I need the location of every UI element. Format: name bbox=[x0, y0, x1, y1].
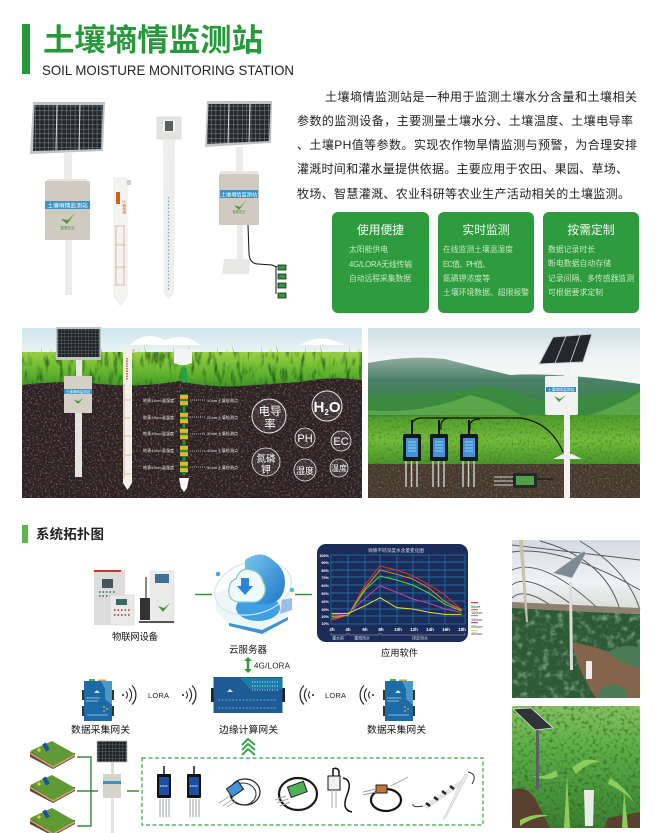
x axis labels: 10h bbox=[394, 627, 402, 632]
bubble: humidity: 湿度 bbox=[296, 465, 314, 476]
y axis labels: 70% bbox=[321, 576, 330, 580]
depth labels left: 地表20cm温湿度 bbox=[143, 415, 174, 420]
x axis labels: 12h bbox=[410, 627, 418, 632]
accent bar bbox=[22, 24, 30, 74]
bubble: NPK: 氮磷 bbox=[256, 453, 276, 465]
sensor: soil 4-pin B bbox=[187, 766, 201, 817]
label: LORA right: LORA bbox=[325, 691, 346, 700]
label: IoT equipment: 物联网设备 bbox=[112, 631, 159, 642]
soil bbox=[22, 378, 362, 498]
bubble: EC bbox=[331, 431, 351, 451]
intro paragraph: 土壤墒情监测站是一种用于监测土壤水分含量和土壤相关 bbox=[325, 89, 637, 104]
label: right gateway: 数据采集网关 bbox=[367, 723, 426, 736]
phase labels bbox=[331, 633, 465, 640]
depth labels right: 10cm土壤检测点 bbox=[207, 398, 238, 403]
dotted leaders bbox=[190, 400, 206, 467]
depth labels right: 50cm土壤检测点 bbox=[207, 465, 238, 470]
y axis labels bbox=[319, 554, 330, 626]
dashed frame bbox=[142, 758, 483, 825]
label: 4G/LORA uplink: 4G/LORA bbox=[254, 662, 291, 670]
product: solar station left: 智慧农业 bbox=[60, 225, 75, 230]
crops and soil bbox=[512, 608, 640, 698]
wireless icon 2 bbox=[182, 686, 196, 704]
data lines bbox=[332, 566, 462, 620]
logger box: 土壤墒情监测站 bbox=[548, 387, 574, 392]
y axis labels: 100% bbox=[319, 554, 330, 558]
bubble: H2O: O bbox=[329, 399, 341, 416]
heading text: 系统拓扑图 bbox=[36, 526, 104, 542]
field tiles bbox=[30, 741, 75, 833]
card: real-time monitoring bbox=[438, 212, 534, 313]
label: LORA left: LORA bbox=[148, 691, 169, 700]
sensor family box bbox=[142, 758, 483, 825]
intro paragraph: 牧场、智慧灌溉、农业科研等农业生产活动相关的土壤监测。 bbox=[297, 186, 630, 201]
panel: field scene with sensors bbox=[368, 328, 640, 498]
product: tube probe with display bbox=[157, 117, 181, 299]
product: ruler probe bbox=[114, 178, 131, 306]
bubble: EC: EC bbox=[333, 436, 349, 448]
card: custom built: 数据记录时长 bbox=[548, 244, 595, 254]
bubble: humidity bbox=[294, 459, 316, 481]
IoT equipment bbox=[94, 570, 174, 625]
heading: 土壤墒情监测站 bbox=[43, 23, 263, 58]
phase labels: 灌溉用水 bbox=[354, 634, 370, 640]
bubble: NPK: 钾 bbox=[261, 464, 271, 476]
upward chevrons bbox=[242, 739, 255, 755]
far wall band bbox=[512, 602, 640, 614]
bubble: temperature bbox=[330, 459, 348, 477]
bubble: H2O bbox=[312, 391, 342, 421]
depth labels right bbox=[207, 398, 238, 470]
depth labels right: 40cm土壤检测点 bbox=[207, 448, 238, 453]
wireless icon 3 bbox=[300, 686, 314, 704]
depth labels right: 30cm土壤检测点 bbox=[207, 431, 238, 436]
chart legend: 100cm bbox=[471, 611, 482, 615]
english subtitle: SOIL MOISTURE MONITORING STATION bbox=[42, 62, 294, 78]
bubble: NPK bbox=[252, 448, 280, 476]
y axis labels: 90% bbox=[321, 561, 330, 565]
intro paragraph: 参数的监测设备，主要测量土壤水分、土壤温度、土壤电导率 bbox=[297, 113, 633, 128]
depth labels right: 20cm土壤检测点 bbox=[207, 415, 238, 420]
y axis labels: 40% bbox=[321, 600, 330, 604]
card: real-time monitoring: 在线监测土壤温湿度 bbox=[443, 244, 513, 254]
bubble: PH bbox=[295, 428, 315, 448]
tube probe bbox=[123, 347, 135, 490]
section heading bbox=[22, 525, 104, 543]
meadow bbox=[368, 415, 640, 466]
depth labels left: 地表30cm温湿度 bbox=[143, 431, 174, 436]
x axis labels: 14h bbox=[426, 627, 434, 632]
sensor 3 bbox=[460, 420, 478, 487]
sensor 1 bbox=[403, 420, 421, 487]
card: custom built: 按需定制 bbox=[567, 223, 615, 237]
heading accent bbox=[22, 525, 28, 543]
bubble: conductivity: 电导 bbox=[258, 405, 282, 418]
two-way arrow bbox=[244, 657, 252, 673]
chart legend bbox=[471, 602, 482, 636]
card: custom built bbox=[543, 212, 639, 313]
depth labels left bbox=[143, 398, 174, 470]
field 2 bbox=[30, 775, 75, 803]
panel: soil cross-section bbox=[22, 327, 362, 498]
card: easy to use: 太阳能供电 bbox=[349, 244, 388, 254]
underground soil bbox=[368, 464, 640, 498]
product: station with sensors: 智慧农业 bbox=[233, 209, 245, 214]
soil probe tube bbox=[584, 790, 594, 826]
sensor: coiled orange bbox=[363, 777, 408, 811]
sensor 2 bbox=[430, 420, 448, 487]
small station bbox=[97, 741, 127, 833]
cables bbox=[412, 418, 563, 452]
label: application software: 应用软件 bbox=[381, 647, 418, 658]
greenhouse arches bbox=[512, 541, 640, 620]
card: real-time monitoring: EC值、PH值、 bbox=[443, 259, 490, 269]
multi-depth sensor bbox=[174, 349, 192, 492]
product: solar station left: 土壤墒情监测站 bbox=[47, 202, 88, 210]
y axis labels: 30% bbox=[321, 608, 330, 612]
left data gateway bbox=[82, 679, 114, 721]
chart legend: 150cm bbox=[471, 618, 482, 622]
card: real-time monitoring: 实时监测 bbox=[462, 223, 510, 237]
photo: greenhouse bbox=[512, 540, 640, 698]
photo: corn field bbox=[512, 706, 640, 828]
cloud server illustration bbox=[209, 553, 297, 634]
label: cloud server: 云服务器 bbox=[229, 644, 267, 656]
wireless icon 1 bbox=[122, 686, 136, 704]
card: easy to use bbox=[332, 212, 429, 313]
title block bbox=[22, 23, 294, 78]
x axis labels: 16h bbox=[442, 627, 450, 632]
product: solar station left bbox=[30, 102, 105, 295]
base plate bbox=[553, 454, 582, 459]
label: left gateway: 数据采集网关 bbox=[71, 723, 130, 736]
y axis labels: 80% bbox=[321, 569, 330, 573]
field 1 bbox=[30, 741, 75, 769]
station pole bbox=[564, 362, 570, 498]
bubble: temperature: 温度 bbox=[331, 463, 347, 473]
chart legend: 200cm bbox=[471, 625, 482, 629]
card: real-time monitoring: 氮磷钾浓度等 bbox=[443, 273, 490, 283]
logger box bbox=[545, 376, 578, 415]
y axis labels: 10% bbox=[321, 622, 330, 626]
connector lines bbox=[195, 594, 312, 596]
chart title: 墒情不同深度水含量变化图 bbox=[368, 547, 424, 554]
bubble: conductivity bbox=[252, 399, 286, 433]
depth labels left: 地表40cm温湿度 bbox=[143, 448, 174, 453]
depth labels left: 地表50cm温湿度 bbox=[143, 465, 174, 470]
plot grid bbox=[331, 555, 465, 624]
panel bbox=[513, 708, 553, 730]
sensor: multi-depth tube bbox=[413, 772, 474, 820]
card: real-time monitoring: 土壤环境数据、超限报警 bbox=[443, 287, 529, 297]
intro paragraph bbox=[297, 89, 637, 201]
x axis labels: 2h bbox=[329, 627, 335, 632]
chart legend: 400cm bbox=[471, 632, 482, 636]
x axis labels: 4h bbox=[345, 627, 351, 632]
y axis labels: 50% bbox=[321, 592, 330, 596]
x axis labels: 8h bbox=[378, 627, 384, 632]
label: edge gateway: 边缘计算网关 bbox=[219, 723, 278, 736]
right data gateway bbox=[383, 679, 415, 721]
edge computing gateway bbox=[211, 677, 285, 713]
bubble: H2O: 2 bbox=[324, 408, 329, 417]
intro paragraph: 灌溉时间和灌水量提供依据。主要应用于农田、果园、草场、 bbox=[297, 161, 628, 176]
wireless icon 4 bbox=[360, 686, 374, 704]
application software chart bbox=[317, 544, 468, 642]
mountains bbox=[368, 358, 640, 425]
station on soil: 土壤墒情监测站 bbox=[66, 389, 91, 394]
x axis labels: 6h bbox=[362, 627, 368, 632]
field wiring bbox=[77, 757, 139, 826]
y axis labels: 20% bbox=[321, 615, 330, 619]
product: ruler probe: 土壤墒情 bbox=[122, 200, 127, 214]
depth labels left: 地表10cm温湿度 bbox=[143, 398, 174, 403]
sensor: adapter bbox=[328, 768, 352, 812]
phase labels: 排定用水 bbox=[412, 634, 428, 640]
solar panel bbox=[539, 334, 592, 364]
card: easy to use: 4G/LORA无线传输 bbox=[349, 259, 412, 269]
green soil sensor bbox=[494, 473, 553, 488]
product: station with sensors: 土壤墒情监测站 bbox=[221, 190, 257, 198]
y axis labels: 60% bbox=[321, 584, 330, 588]
card: easy to use: 使用便捷 bbox=[357, 223, 404, 237]
bubble: H2O: H bbox=[314, 399, 324, 416]
sensor: coiled blue bbox=[219, 779, 260, 807]
field 3 bbox=[30, 808, 75, 833]
card: custom built: 记录间隔、多传感器监测 bbox=[548, 273, 634, 283]
sky bbox=[22, 328, 362, 362]
sensor: soil 4-pin A bbox=[157, 766, 171, 817]
station on soil bbox=[56, 327, 101, 477]
intro paragraph: 、土壤PH值等参数。实现农作物旱情监测与预警，为合理安排 bbox=[297, 137, 637, 152]
card: custom built: 断电数据自动存储 bbox=[548, 258, 611, 268]
corn leaves bbox=[520, 760, 634, 828]
pole and panel bbox=[569, 582, 573, 670]
product: station with sensors bbox=[205, 101, 286, 298]
soil probe bbox=[586, 661, 592, 679]
sky bbox=[368, 328, 640, 388]
bubble: conductivity: 率 bbox=[264, 417, 276, 431]
x axis labels bbox=[329, 627, 466, 632]
chart background bbox=[317, 544, 468, 642]
sensor: coiled green bbox=[275, 778, 317, 810]
chart legend: 50cm bbox=[471, 605, 480, 609]
grass band bbox=[22, 342, 362, 390]
card: easy to use: 自动远程采集数据 bbox=[349, 273, 411, 283]
x axis labels: 18h bbox=[458, 627, 466, 632]
card: custom built: 可根据要求定制 bbox=[548, 287, 603, 297]
soil patches bbox=[512, 788, 640, 828]
bubble: PH: PH bbox=[297, 433, 313, 445]
phase labels: 灌水前 bbox=[332, 634, 344, 640]
panel pole bbox=[536, 730, 539, 790]
